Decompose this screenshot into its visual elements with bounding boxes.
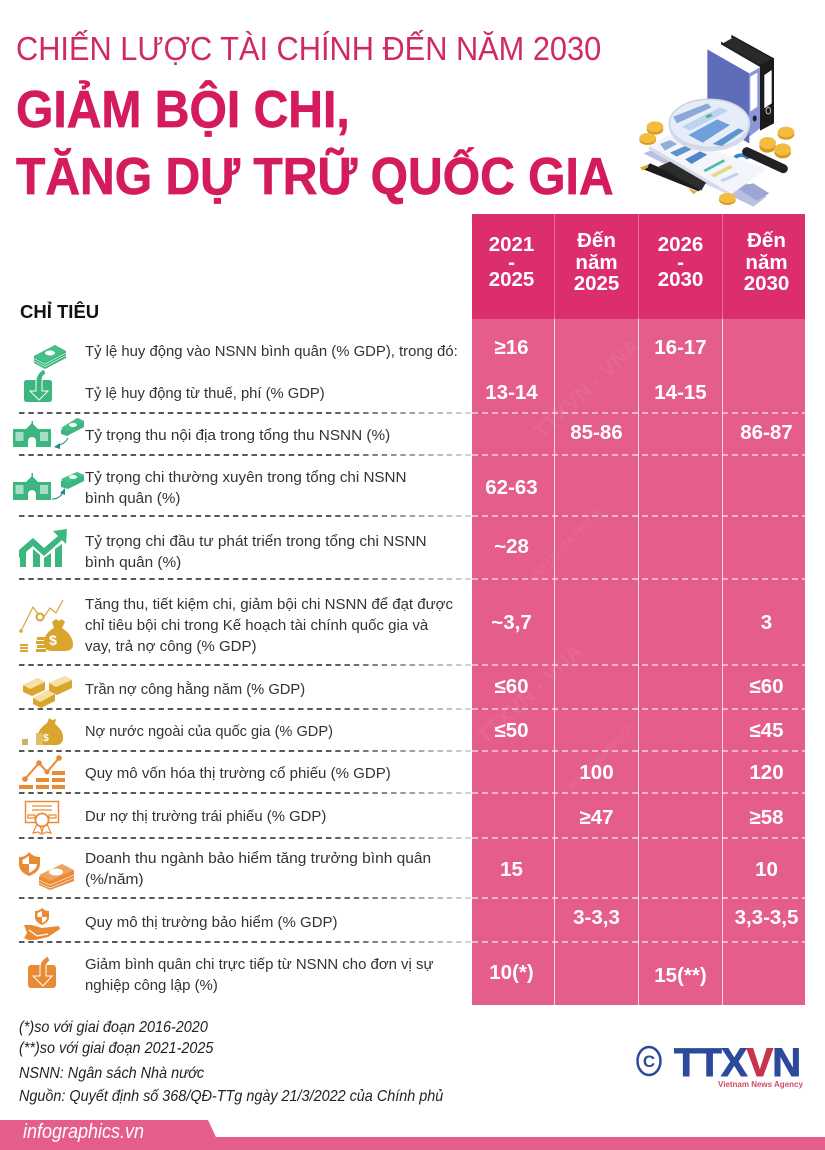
column header: 2021-2025: 2021 xyxy=(489,233,534,256)
main heading xyxy=(16,80,614,205)
row text: Doanh thu ngành bảo hiểm tăng trưởng bình quân xyxy=(85,850,431,866)
icon: money bags and trend line xyxy=(19,600,73,652)
value: 3-3,3 xyxy=(573,906,620,929)
value: 13-14 xyxy=(485,381,538,404)
value: 10 xyxy=(755,858,778,881)
icon: money bags and trend line: $ xyxy=(49,632,57,648)
column header: Đến năm 2030: năm xyxy=(745,250,788,274)
value: 62-63 xyxy=(485,476,538,499)
column header: 2026-2030: 2030 xyxy=(658,268,703,291)
row text: Quy mô vốn hóa thị trường cổ phiếu (% GDP) xyxy=(85,764,391,782)
row text: Quy mô thị trường bảo hiểm (% GDP) xyxy=(85,914,338,930)
row text: nghiệp công lập (%) xyxy=(85,977,218,994)
icon: green growth chart xyxy=(19,529,67,567)
icon: green cash and inbox xyxy=(24,345,66,402)
row text: (%/năm) xyxy=(85,871,144,888)
column header: Đến năm 2025 xyxy=(574,229,619,295)
main heading: GIẢM BỘI CHI, xyxy=(16,80,350,138)
value: ≥58 xyxy=(749,806,784,829)
row text: bình quân (%) xyxy=(85,554,181,571)
text: TTXVN - VNA xyxy=(530,335,644,444)
value: 16-17 xyxy=(654,336,707,359)
column header: 2021-2025: 2025 xyxy=(489,268,534,291)
footnotes xyxy=(19,1019,214,1056)
icon: shield on hand xyxy=(24,908,60,940)
footnotes: (**)so với giai đoạn 2021-2025 xyxy=(19,1040,213,1056)
value: 15 xyxy=(500,858,523,881)
footer website: infographics.vn xyxy=(23,1121,144,1143)
value: ≤60 xyxy=(494,675,529,698)
value: 120 xyxy=(749,761,784,784)
icon: stacks of gold cash xyxy=(23,676,72,708)
icon: bond certificate xyxy=(24,800,60,835)
logo: TTXVN: C xyxy=(643,1052,655,1071)
column header: Đến năm 2025: năm xyxy=(575,250,618,274)
column header: 2026-2030: 2026 xyxy=(658,233,703,256)
title line 1: CHIẾN LƯỢC TÀI CHÍNH ĐẾN NĂM 2030 xyxy=(16,31,601,68)
illustration: binders and magnifier xyxy=(639,35,794,206)
icon: building receiving cash xyxy=(13,418,84,449)
row text xyxy=(85,956,434,994)
value: ~3,7 xyxy=(491,611,532,634)
value: 10(*) xyxy=(489,961,534,984)
value: 85-86 xyxy=(570,421,623,444)
value: 14-15 xyxy=(654,381,707,404)
table header band xyxy=(472,214,805,319)
value: ≤60 xyxy=(749,675,784,698)
footnotes: (*)so với giai đoạn 2016-2020 xyxy=(19,1019,208,1036)
row text: Nợ nước ngoài của quốc gia (% GDP) xyxy=(85,722,333,740)
value: ≥16 xyxy=(494,336,529,359)
value: 3,3-3,5 xyxy=(735,906,798,929)
row text: chỉ tiêu bội chi trong Kế hoạch tài chính quốc gia và xyxy=(85,617,428,634)
row text: bình quân (%) xyxy=(85,490,180,507)
column header: Đến năm 2025: Đến xyxy=(577,229,616,252)
row text xyxy=(85,468,406,507)
value: 15(**) xyxy=(654,964,707,987)
icon: shield and cash xyxy=(19,852,74,890)
icon: orange inbox xyxy=(28,956,56,988)
column header: Đến năm 2030 xyxy=(744,229,789,295)
row text xyxy=(85,850,431,888)
table background xyxy=(472,319,805,1005)
row text: Tỷ trọng chi thường xuyên trong tổng chi NSNN xyxy=(85,468,406,486)
column header: 2026-2030 xyxy=(658,233,703,291)
text: INFOGRAPHICS xyxy=(564,721,638,794)
value: ~28 xyxy=(494,535,529,558)
column header: 2021-2025: - xyxy=(508,250,515,274)
row text: Tỷ lệ huy động từ thuế, phí (% GDP) xyxy=(85,384,325,402)
row text xyxy=(85,596,453,655)
row text: Trần nợ công hằng năm (% GDP) xyxy=(85,680,305,698)
column header: 2021-2025 xyxy=(489,233,534,291)
icon: money bags xyxy=(22,718,64,745)
text: TTXVN - VNA xyxy=(473,640,587,749)
value: ≥47 xyxy=(579,806,614,829)
value: 3 xyxy=(761,611,772,634)
column header: Đến năm 2030: 2030 xyxy=(744,272,789,295)
value: ≤45 xyxy=(749,719,784,742)
column header: 2026-2030: - xyxy=(677,250,684,274)
logo: TTXVN: Vietnam News Agency xyxy=(718,1080,803,1089)
abbreviation and source: Nguồn: Quyết định số 368/QĐ-TTg ngày 21/3/2022 của Chính phủ xyxy=(19,1088,443,1105)
value: 100 xyxy=(579,761,614,784)
row text: Tỷ trọng thu nội địa trong tổng thu NSNN (%) xyxy=(85,426,390,444)
row text xyxy=(85,532,427,571)
icon: building spending cash xyxy=(13,472,84,500)
logo: TTXVN: TTXVN xyxy=(674,1041,800,1085)
row text: Giảm bình quân chi trực tiếp từ NSNN cho đơn vị sự xyxy=(85,956,433,972)
value: 86-87 xyxy=(740,421,793,444)
value: ≤50 xyxy=(494,719,529,742)
row label heading: CHỈ TIÊU xyxy=(20,301,99,322)
icon: orange market chart xyxy=(19,755,65,789)
row text: Dư nợ thị trường trái phiếu (% GDP) xyxy=(85,808,326,824)
column header: Đến năm 2030: Đến xyxy=(747,229,786,252)
row text: Tỷ trọng chi đầu tư phát triển trong tổng chi NSNN xyxy=(85,532,427,550)
abbreviation and source: NSNN: Ngân sách Nhà nước xyxy=(19,1065,204,1082)
row text: Tỷ lệ huy động vào NSNN bình quân (% GDP), trong đó: xyxy=(85,342,458,360)
footer band xyxy=(0,1120,825,1150)
text: INFOGRAPHICS xyxy=(528,505,605,582)
column header: Đến năm 2025: 2025 xyxy=(574,272,619,295)
main heading: TĂNG DỰ TRỮ QUỐC GIA xyxy=(16,147,614,205)
icon: money bags: $ xyxy=(43,733,49,744)
abbreviation and source xyxy=(19,1065,443,1105)
logo: TTXVN xyxy=(636,1041,803,1089)
row text: Tăng thu, tiết kiệm chi, giảm bội chi NSNN để đạt được xyxy=(85,596,453,612)
row text: vay, trả nợ công (% GDP) xyxy=(85,638,257,655)
